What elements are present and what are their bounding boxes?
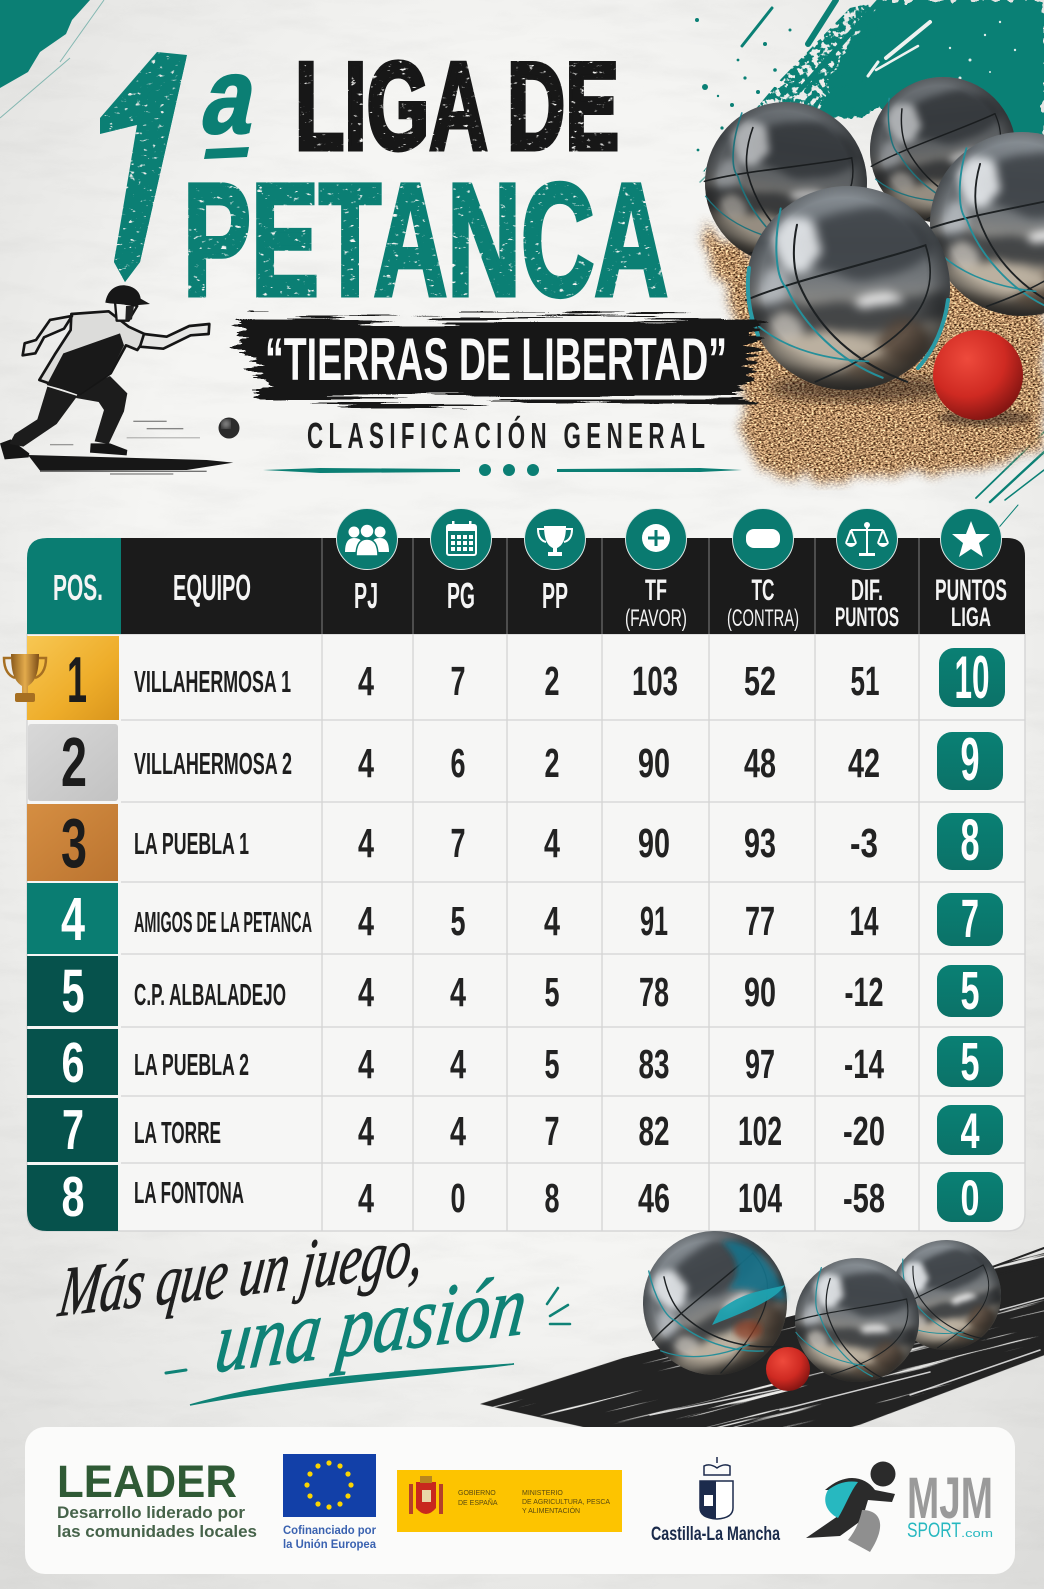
tagline flourishes	[166, 1288, 570, 1405]
table row 3 values: 90	[638, 820, 670, 866]
table row 4 values: 4	[358, 898, 374, 944]
logo: Gobierno de España: DE ESPAÑA	[458, 1498, 498, 1507]
table row 1 values	[358, 658, 880, 704]
header labels: TF	[645, 574, 667, 607]
bottom boules	[620, 1208, 1010, 1398]
table row 8 values: 8	[544, 1175, 560, 1221]
icon: plus	[626, 508, 686, 570]
table row 5 values: 4	[450, 969, 466, 1015]
team names: LA PUEBLA 2	[134, 1047, 249, 1082]
logo: LEADER: las comunidades locales	[57, 1523, 257, 1541]
table row 5 values: 78	[639, 969, 669, 1015]
table row 6 values: 4	[358, 1041, 374, 1087]
league points badges: 9	[960, 726, 980, 793]
table row 7 values: 7	[544, 1108, 560, 1154]
heading ornament	[263, 464, 742, 476]
logo: Gobierno de España: DE AGRICULTURA, PESCA	[522, 1499, 610, 1506]
position numbers: 7	[62, 1098, 84, 1162]
red jack shadow	[937, 410, 1033, 426]
table row 6 values: 97	[745, 1041, 775, 1087]
red jack small	[766, 1347, 810, 1391]
title: LIGA DE: LIGA DE	[295, 38, 619, 176]
red jack	[933, 330, 1023, 420]
table row 2 values	[358, 740, 880, 786]
top-right teal paint splash	[695, 0, 1044, 182]
table row 1 values: 2	[544, 658, 560, 704]
boule: back left shade	[705, 102, 867, 264]
league points badges: 8	[960, 808, 980, 873]
table row 8 values	[358, 1175, 885, 1221]
table row 5 values	[358, 969, 884, 1015]
logo: Gobierno de España: GOBIERNO	[458, 1490, 496, 1497]
subtitle brush band	[236, 319, 756, 402]
icon: gold trophy	[4, 654, 46, 702]
team names	[134, 664, 312, 1210]
logo: Gobierno de España	[397, 1470, 622, 1532]
table row 8 values: -58	[843, 1175, 885, 1221]
header labels: PP	[542, 575, 568, 616]
table row 3 values: 93	[744, 820, 776, 866]
table row 6 values: 4	[450, 1041, 466, 1087]
table row 7 values: 4	[450, 1108, 466, 1154]
boules photo group	[695, 70, 1044, 426]
table row 2 values: 2	[544, 740, 560, 786]
logo: European Union: Cofinanciado por	[283, 1523, 376, 1537]
team names: VILLAHERMOSA 1	[134, 664, 291, 699]
boule: back right	[863, 70, 1023, 230]
header labels: (FAVOR)	[625, 605, 687, 632]
table row 5 values: 90	[744, 969, 776, 1015]
icon: calendar	[430, 508, 492, 570]
sand under the boules	[700, 226, 1044, 478]
table row 6 values: -14	[844, 1041, 884, 1087]
boule: far right	[882, 1231, 1010, 1359]
table row 7 values	[358, 1108, 885, 1154]
table row 1 values: 51	[850, 658, 880, 704]
table row 7 values: -20	[843, 1108, 885, 1154]
table row 3 values: 7	[450, 820, 466, 866]
boule: back left	[695, 92, 877, 274]
table row 2 values: 4	[358, 740, 374, 786]
table row 1 values: 4	[358, 658, 374, 704]
header labels: DIF.	[851, 574, 883, 607]
table row 2 values: 90	[638, 740, 670, 786]
table row 3 values: 4	[358, 820, 374, 866]
logo: LEADER: LEADER	[57, 1456, 237, 1507]
table row 6 values: 5	[544, 1041, 560, 1087]
league points badges: 7	[961, 889, 979, 949]
table row 8 values: 4	[358, 1175, 374, 1221]
logo: Castilla-La Mancha: Castilla-La Mancha	[651, 1524, 780, 1545]
top-left teal brush stroke	[0, 0, 104, 118]
table row 2 values: 48	[744, 740, 776, 786]
boule: middle	[789, 1252, 925, 1388]
subtitle: Tierras de Libertad: “TIERRAS DE LIBERTAD”	[265, 326, 727, 393]
icon: star	[940, 508, 1002, 570]
team names: LA PUEBLA 1	[134, 826, 249, 861]
table row 6 values	[358, 1041, 884, 1087]
table row 5 values: 5	[544, 969, 560, 1015]
logo: Gobierno de España: MINISTERIO	[522, 1490, 563, 1497]
position numbers: 5	[62, 957, 84, 1025]
position numbers: 2	[61, 723, 87, 801]
table row 2 values: 6	[450, 740, 466, 786]
league points badges: 4	[960, 1103, 980, 1159]
position cells	[27, 636, 119, 1231]
table header bar	[121, 538, 1025, 634]
icon: minus	[732, 508, 794, 570]
heading: Clasificación General: CLASIFICACIÓN GENERAL	[307, 416, 705, 456]
table row 4 values: 14	[850, 898, 879, 944]
position numbers: 4	[61, 885, 85, 953]
player silhouette	[0, 285, 233, 475]
teal reflection on left boule	[712, 1241, 786, 1340]
boule: right	[924, 126, 1044, 322]
icon: trophy	[524, 508, 586, 570]
logo: Castilla-La Mancha	[651, 1457, 780, 1545]
sponsors panel	[25, 1427, 1015, 1574]
league points badges: 5	[960, 961, 980, 1021]
team names: LA FONTONA	[134, 1175, 244, 1210]
header labels	[53, 567, 1007, 632]
table row 8 values: 104	[738, 1175, 782, 1221]
table row 4 values: 4	[544, 898, 560, 944]
logo: MJM Sport: SPORT	[907, 1519, 961, 1542]
icon: players	[336, 508, 398, 570]
table row 7 values: 4	[358, 1108, 374, 1154]
table row 2 values: 42	[848, 740, 880, 786]
position numbers: 6	[62, 1031, 84, 1095]
team names: C.P. ALBALADEJO	[134, 977, 286, 1012]
table row 4 values: 5	[450, 898, 466, 944]
table row 7 values: 102	[738, 1108, 782, 1154]
bottom black brush	[478, 1244, 1044, 1516]
table row 5 values: 4	[358, 969, 374, 1015]
position numbers	[61, 643, 87, 1229]
boule: front large	[746, 186, 950, 390]
table row 4 values: 91	[640, 898, 668, 944]
logo: MJM Sport	[806, 1462, 993, 1552]
header labels: EQUIPO	[173, 567, 251, 608]
logo: European Union: la Unión Europea	[283, 1537, 376, 1551]
table row 3 values	[358, 820, 878, 866]
logo: LEADER	[57, 1456, 257, 1541]
table row 3 values: -3	[850, 820, 878, 866]
header labels: TC	[752, 574, 774, 607]
standings table: AMIGOS DE LA PETANCA	[134, 907, 312, 939]
position numbers: 8	[62, 1165, 84, 1229]
boule: left	[620, 1208, 810, 1398]
table row 5 values: -12	[844, 969, 884, 1015]
league points badges: 0	[960, 1170, 980, 1226]
position numbers: 1	[67, 643, 87, 716]
table row 3 values: 4	[544, 820, 560, 866]
header labels: PJ	[354, 575, 378, 616]
icon: scales	[836, 508, 898, 570]
header labels: POS.	[53, 567, 103, 608]
header labels: (CONTRA)	[727, 605, 799, 632]
boule rim accents	[748, 268, 948, 368]
tagline black: Más que un juego,	[54, 1212, 429, 1332]
position numbers: 3	[61, 804, 87, 882]
league points badges	[937, 644, 1005, 1226]
title number: 1a: a	[193, 36, 270, 157]
logo: Gobierno de España: Y ALIMENTACIÓN	[522, 1506, 580, 1515]
contact shadow	[768, 374, 952, 402]
lower-right teal streaks	[976, 432, 1044, 545]
table row 4 values: 77	[745, 898, 775, 944]
title number: 1a	[100, 52, 252, 282]
header POS cell	[27, 538, 121, 634]
tagline teal: una pasión	[211, 1255, 532, 1391]
table row 8 values: 46	[638, 1175, 670, 1221]
logo: MJM Sport: MJM	[907, 1466, 993, 1531]
league points badges: 5	[960, 1032, 980, 1092]
table row 6 values: 83	[638, 1041, 670, 1087]
logo: LEADER: Desarrollo liderado por	[57, 1504, 246, 1522]
table row 1 values: 103	[632, 658, 678, 704]
table row 1 values: 52	[744, 658, 776, 704]
table body	[27, 634, 1025, 1231]
team names: LA TORRE	[134, 1115, 221, 1150]
table row 7 values: 82	[638, 1108, 670, 1154]
header labels: LIGA	[951, 602, 991, 632]
standings table	[4, 508, 1044, 1574]
logo: MJM Sport: .com	[961, 1528, 993, 1540]
header labels: PUNTOS	[835, 602, 899, 632]
table row 1 values: 7	[450, 658, 466, 704]
league points badges: 10	[954, 644, 990, 711]
table row 8 values: 0	[450, 1175, 466, 1221]
header labels: PG	[447, 575, 475, 616]
table row 4 values	[358, 898, 879, 944]
boule: back right shade	[870, 77, 1016, 223]
team names: VILLAHERMOSA 2	[134, 746, 292, 781]
logo: European Union	[283, 1454, 376, 1551]
small thrown boule	[218, 418, 240, 438]
title: PETANCA: PETANCA	[183, 150, 668, 329]
